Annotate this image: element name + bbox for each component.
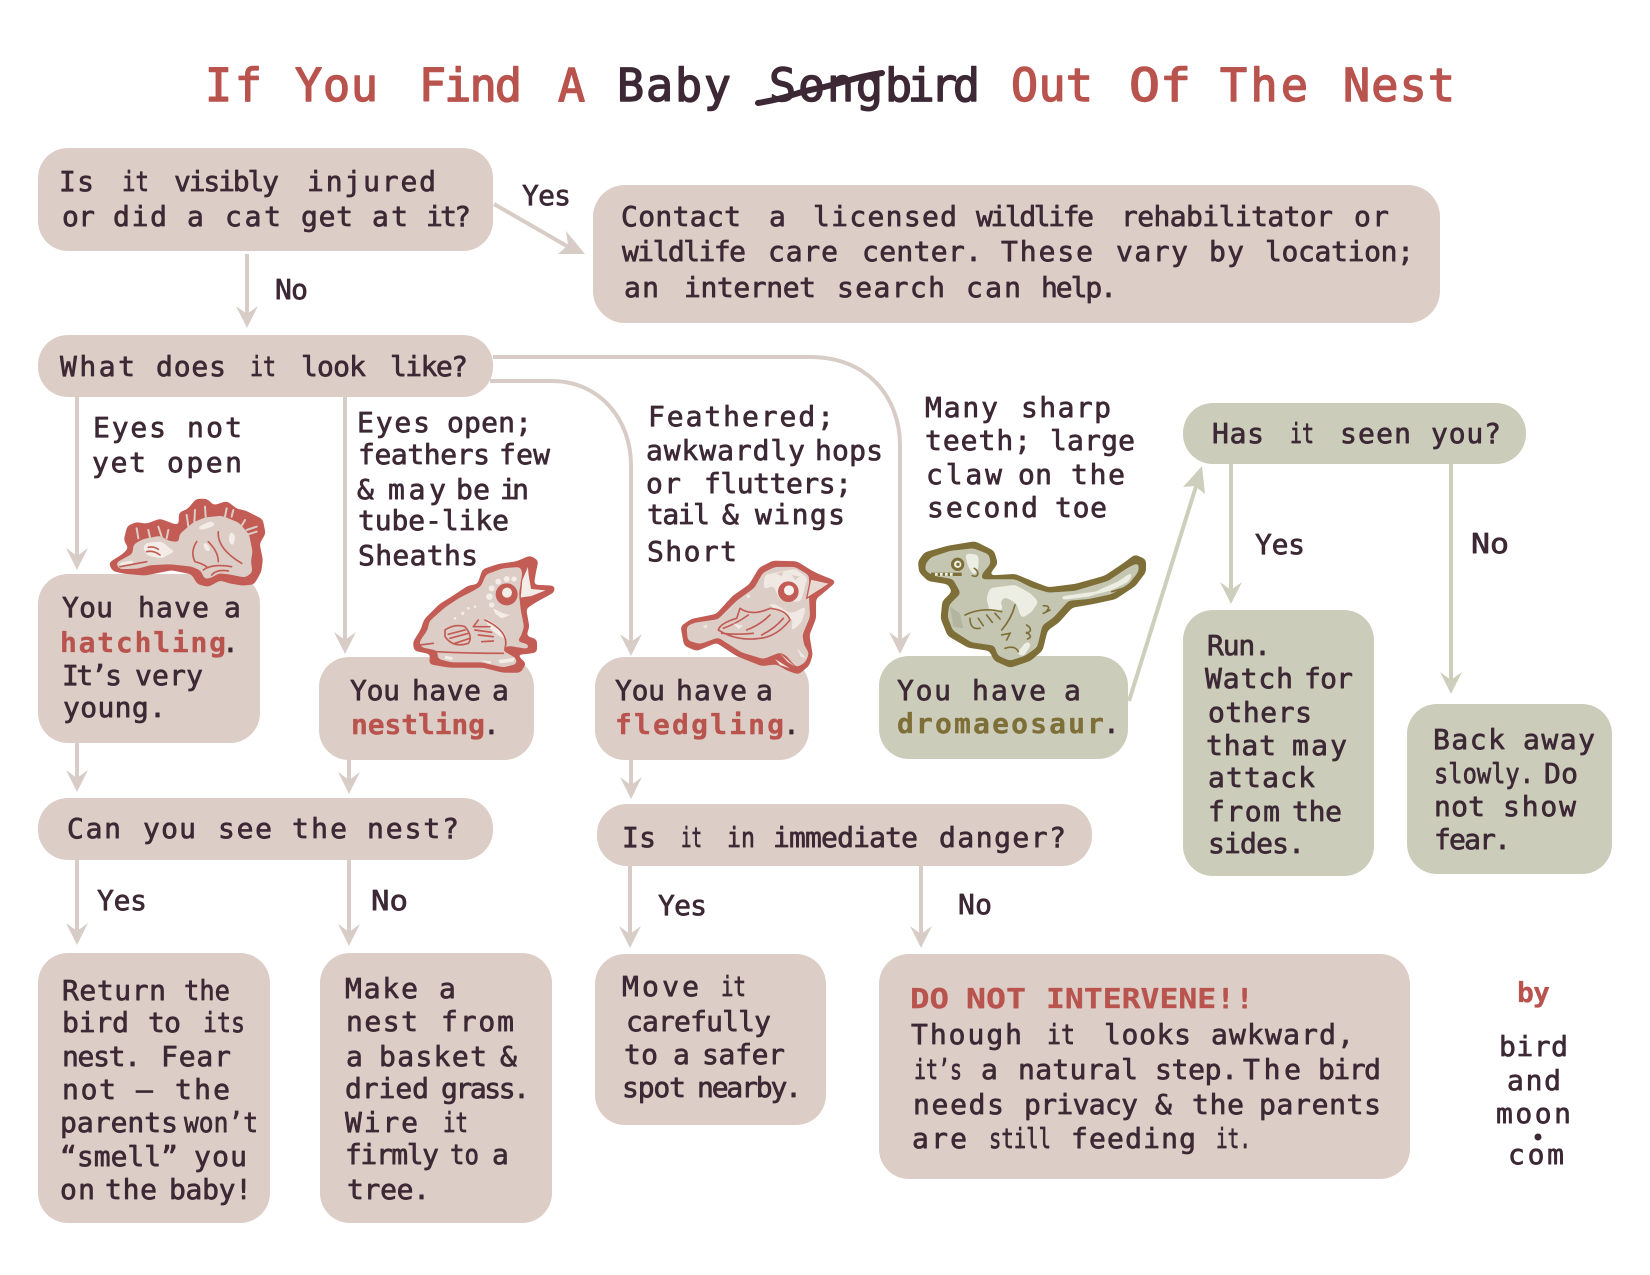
text: return the bird: nest. bbox=[62, 1040, 141, 1073]
text: contact rehabilitator: center. bbox=[862, 235, 982, 268]
text: contact rehabilitator: a bbox=[769, 200, 786, 233]
text: hatchling: You bbox=[62, 591, 113, 624]
text: injured question: injured bbox=[307, 165, 436, 198]
title: Nest bbox=[1343, 59, 1455, 112]
text: immediate danger: in bbox=[727, 821, 755, 854]
arrow: nest no bbox=[338, 860, 360, 946]
text: hatchling: It’s bbox=[62, 659, 122, 692]
text: hatchling: very bbox=[135, 659, 203, 692]
panel: has it seen you bbox=[1183, 403, 1526, 464]
heading: do not intervene: NOT bbox=[966, 982, 1026, 1015]
text: fledgling: have bbox=[676, 674, 747, 707]
text: eyes not yet open: yet bbox=[92, 446, 146, 479]
text: eyes not yet open bbox=[92, 411, 242, 479]
text: natural step explanation: parents bbox=[1259, 1088, 1381, 1121]
text: contact rehabilitator: location; bbox=[1265, 235, 1414, 268]
text: run: Watch bbox=[1205, 662, 1293, 695]
text: contact rehabilitator: by bbox=[1209, 235, 1244, 268]
panel: injured question bbox=[38, 148, 493, 251]
text: dromaeosaur: dromaeosaur bbox=[897, 707, 1104, 740]
label: seen yes: Yes bbox=[1255, 528, 1305, 561]
text: natural step explanation: step. bbox=[1155, 1053, 1238, 1086]
text: return the bird bbox=[60, 974, 258, 1206]
panel: do not intervene bbox=[879, 954, 1410, 1179]
label: danger yes: Yes bbox=[658, 889, 707, 922]
text: feathered description: or bbox=[646, 467, 681, 500]
text: eyes not yet open: not bbox=[187, 411, 242, 444]
text: feathered description bbox=[646, 400, 883, 568]
text: dromaeosaur: a bbox=[1064, 674, 1081, 707]
text: what does it look like: it bbox=[250, 350, 276, 383]
label: nest no: No bbox=[371, 884, 408, 917]
text: feathered description: hops bbox=[815, 434, 883, 467]
text: run bbox=[1205, 629, 1353, 860]
text: sharp teeth description: claw bbox=[926, 458, 1002, 491]
panel: hatchling bbox=[38, 574, 260, 743]
text: nestling: a bbox=[492, 674, 509, 707]
text: injured question: a bbox=[187, 200, 204, 233]
text: can you see the nest bbox=[67, 812, 459, 845]
text: injured question: cat bbox=[225, 200, 281, 233]
arrow: danger yes bbox=[619, 866, 641, 948]
text: run: attack bbox=[1208, 761, 1315, 794]
label: nest yes: Yes bbox=[97, 884, 147, 917]
text: natural step explanation: feeding bbox=[1071, 1122, 1196, 1155]
text: contact rehabilitator: licensed bbox=[813, 200, 957, 233]
text: back away bbox=[1433, 723, 1595, 856]
text: feathered description: flutters; bbox=[704, 467, 852, 500]
text: has it seen you: Has bbox=[1212, 417, 1264, 450]
heading: do not intervene: INTERVENE!! bbox=[1046, 982, 1254, 1015]
text: return the bird: bird bbox=[62, 1006, 129, 1039]
text: hatchling: a bbox=[224, 591, 241, 624]
panel: run bbox=[1183, 610, 1374, 876]
text: natural step explanation: & bbox=[1155, 1088, 1172, 1121]
text: eyes open description: tube-like bbox=[358, 504, 509, 537]
text: make a nest: firmly bbox=[345, 1138, 439, 1171]
text: natural step explanation: are bbox=[912, 1122, 967, 1155]
text: can you see the nest: see bbox=[218, 812, 272, 845]
text: immediate danger bbox=[622, 821, 1066, 854]
text: contact rehabilitator: vary bbox=[1116, 235, 1188, 268]
heading: do not intervene bbox=[910, 982, 1254, 1015]
text: run: the bbox=[1292, 795, 1342, 828]
panel: fledgling bbox=[595, 657, 809, 760]
text: injured question: it? bbox=[426, 200, 471, 233]
text: natural step explanation: the bbox=[1192, 1088, 1244, 1121]
text: return the bird: Fear bbox=[161, 1040, 231, 1073]
text: contact rehabilitator: an bbox=[624, 271, 659, 304]
text: nestling bbox=[350, 674, 509, 741]
text: sharp teeth description: the bbox=[1071, 458, 1125, 491]
text: fledgling: a bbox=[756, 674, 773, 707]
text: immediate danger: it bbox=[681, 821, 702, 854]
title: Song bbox=[769, 59, 883, 112]
text: what does it look like: look bbox=[301, 350, 366, 383]
text: move it carefully: carefully bbox=[626, 1005, 771, 1038]
icon: dromaeosaur bbox=[919, 542, 1145, 667]
credit: by bird and moon: moon bbox=[1496, 1097, 1571, 1130]
panel: return the bird bbox=[38, 953, 270, 1223]
title: If bbox=[205, 59, 262, 112]
text: eyes open description: few bbox=[499, 438, 550, 471]
text: natural step explanation: privacy bbox=[1024, 1088, 1138, 1121]
credit: by bird and moon bbox=[1496, 976, 1571, 1171]
text: run: Run. bbox=[1207, 629, 1271, 662]
text: what does it look like: like? bbox=[390, 350, 468, 383]
credit: by bird and moon: and bbox=[1507, 1064, 1561, 1097]
text: sharp teeth description: toe bbox=[1055, 491, 1107, 524]
text: make a nest: Wire bbox=[345, 1106, 418, 1139]
text: back away: slowly. bbox=[1434, 757, 1534, 790]
text: injured question: or bbox=[62, 200, 95, 233]
credit: by bird and moon: by bbox=[1517, 976, 1550, 1009]
text: move it carefully bbox=[622, 970, 802, 1104]
text: make a nest: nest bbox=[346, 1005, 418, 1038]
panel: move it carefully bbox=[595, 954, 826, 1125]
text: back away: Back bbox=[1433, 723, 1505, 756]
text: eyes not yet open: open bbox=[167, 446, 242, 479]
text: dromaeosaur: . bbox=[1103, 707, 1120, 740]
text: what does it look like: What bbox=[60, 350, 135, 383]
text: run: sides. bbox=[1208, 827, 1305, 860]
title: You bbox=[295, 59, 378, 112]
text: sharp teeth description: sharp bbox=[1021, 391, 1111, 424]
text: feathered description: awkwardly bbox=[646, 434, 805, 467]
label: danger no: No bbox=[958, 888, 992, 921]
arrow: seen yes bbox=[1220, 464, 1242, 604]
text: return the bird: – bbox=[136, 1073, 153, 1106]
text: move it carefully: to bbox=[624, 1038, 658, 1071]
text: return the bird: won’t bbox=[184, 1106, 258, 1139]
text: has it seen you: you? bbox=[1431, 417, 1501, 450]
text: nestling: . bbox=[483, 708, 500, 741]
text: return the bird: to bbox=[148, 1006, 181, 1039]
text: feathered description: tail bbox=[647, 498, 710, 531]
text: return the bird: the bbox=[184, 974, 230, 1007]
text: make a nest: & bbox=[500, 1040, 517, 1073]
text: run: that bbox=[1206, 729, 1276, 762]
arrow: eyes not yet open bbox=[66, 397, 88, 570]
arrow: sharp teeth bbox=[493, 357, 911, 654]
text: dromaeosaur: have bbox=[972, 674, 1046, 707]
text: immediate danger: danger? bbox=[939, 821, 1066, 854]
panel: can you see the nest bbox=[38, 798, 493, 860]
text: make a nest: a bbox=[439, 972, 456, 1005]
text: injured question: Is bbox=[59, 165, 94, 198]
text: return the bird: baby! bbox=[169, 1173, 252, 1206]
text: can you see the nest: nest? bbox=[367, 812, 459, 845]
text: return the bird: its bbox=[203, 1006, 245, 1039]
text: eyes open description: open; bbox=[447, 406, 532, 439]
text: what does it look like bbox=[60, 350, 468, 383]
text: nestling: nestling bbox=[351, 708, 485, 741]
text: can you see the nest: Can bbox=[67, 812, 121, 845]
text: contact rehabilitator: wildlife bbox=[976, 200, 1094, 233]
text: injured question: did bbox=[113, 200, 167, 233]
text: make a nest: it bbox=[443, 1106, 468, 1139]
text: return the bird: you bbox=[194, 1140, 247, 1173]
text: back away: away bbox=[1523, 723, 1595, 756]
text: fledgling: . bbox=[783, 708, 800, 741]
text: natural step explanation: Though bbox=[911, 1018, 1022, 1051]
text: natural step explanation bbox=[911, 1018, 1381, 1155]
text: back away: not bbox=[1434, 790, 1485, 823]
title: Find bbox=[419, 59, 522, 112]
text: contact rehabilitator: can bbox=[966, 271, 1021, 304]
icon: nestling bird bbox=[414, 557, 554, 672]
text: natural step explanation: it’s bbox=[914, 1053, 962, 1086]
text: move it carefully: a bbox=[673, 1038, 690, 1071]
title: bird bbox=[885, 59, 980, 112]
text: make a nest bbox=[345, 972, 530, 1206]
text: hatchling: . bbox=[222, 626, 239, 659]
text: move it carefully: safer bbox=[702, 1038, 785, 1071]
text: return the bird: Return bbox=[62, 974, 166, 1007]
arrow: hatchling to nest question bbox=[66, 743, 88, 792]
text: natural step explanation: bird bbox=[1318, 1053, 1381, 1086]
text: move it carefully: spot bbox=[622, 1071, 686, 1104]
text: can you see the nest: the bbox=[292, 812, 347, 845]
text: hatchling: hatchling bbox=[60, 626, 226, 659]
text: run: for bbox=[1304, 662, 1353, 695]
text: injured question: it bbox=[122, 165, 149, 198]
text: immediate danger: immediate bbox=[773, 821, 918, 854]
text: has it seen you: it bbox=[1290, 417, 1314, 450]
arrow: injured no bbox=[236, 254, 258, 328]
text: sharp teeth description bbox=[925, 391, 1135, 524]
title: Of bbox=[1129, 59, 1191, 112]
text: injured question bbox=[59, 165, 471, 233]
text: feathered description: Short bbox=[647, 535, 737, 568]
text: move it carefully: Move bbox=[622, 970, 699, 1003]
text: eyes open description: Sheaths bbox=[358, 539, 478, 572]
text: sharp teeth description: large bbox=[1050, 424, 1135, 457]
text: return the bird: parents bbox=[60, 1106, 178, 1139]
text: eyes not yet open: Eyes bbox=[93, 411, 166, 444]
text: make a nest: basket bbox=[379, 1040, 487, 1073]
text: sharp teeth description: second bbox=[927, 491, 1038, 524]
text: sharp teeth description: on bbox=[1018, 458, 1052, 491]
text: natural step explanation: still bbox=[989, 1122, 1051, 1155]
text: hatchling bbox=[60, 591, 241, 724]
title: A bbox=[558, 59, 585, 112]
text: natural step explanation: it. bbox=[1216, 1122, 1251, 1155]
text: contact rehabilitator: internet bbox=[684, 271, 816, 304]
text: nestling: You bbox=[350, 674, 400, 707]
panel: nestling bbox=[319, 657, 534, 760]
text: natural step explanation: The bbox=[1243, 1053, 1301, 1086]
text: can you see the nest: you bbox=[143, 812, 196, 845]
text: eyes open description: feathers bbox=[358, 438, 490, 471]
text: hatchling: young. bbox=[63, 691, 166, 724]
text: natural step explanation: looks bbox=[1104, 1018, 1191, 1051]
text: injured question: at bbox=[372, 200, 408, 233]
text: make a nest: a bbox=[346, 1040, 363, 1073]
panel: back away bbox=[1407, 704, 1612, 874]
text: injured question: visibly bbox=[174, 165, 279, 198]
title: The bbox=[1220, 59, 1308, 112]
title: Out bbox=[1011, 59, 1093, 112]
arrow: danger no bbox=[910, 866, 932, 948]
text: contact rehabilitator: or bbox=[1354, 200, 1389, 233]
text: move it carefully: nearby. bbox=[697, 1071, 802, 1104]
text: contact rehabilitator: Contact bbox=[621, 200, 741, 233]
arrow: fledgling to danger question bbox=[620, 760, 642, 799]
text: injured question: get bbox=[301, 200, 353, 233]
text: has it seen you: seen bbox=[1340, 417, 1411, 450]
text: return the bird: the bbox=[105, 1173, 157, 1206]
arrow: dromaeosaur to seen question bbox=[1129, 466, 1205, 701]
text: contact rehabilitator: search bbox=[837, 271, 945, 304]
text: contact rehabilitator bbox=[621, 200, 1414, 304]
text: fledgling bbox=[615, 674, 800, 741]
icon: fledgling bird bbox=[682, 562, 835, 673]
text: dromaeosaur: You bbox=[897, 674, 951, 707]
text: eyes open description: Eyes bbox=[357, 406, 430, 439]
text: natural step explanation: a bbox=[981, 1053, 998, 1086]
text: what does it look like: does bbox=[156, 350, 226, 383]
text: dromaeosaur bbox=[897, 674, 1120, 740]
text: make a nest: tree. bbox=[347, 1173, 430, 1206]
text: feathered description: wings bbox=[755, 498, 845, 531]
text: feathered description: Feathered; bbox=[648, 400, 834, 433]
panel: what does it look like bbox=[38, 335, 493, 397]
text: natural step explanation: natural bbox=[1018, 1053, 1138, 1086]
text: make a nest: dried bbox=[345, 1072, 429, 1105]
credit: by bird and moon: com bbox=[1508, 1138, 1564, 1171]
text: sharp teeth description: Many bbox=[925, 391, 998, 424]
text: make a nest: from bbox=[441, 1005, 514, 1038]
text: contact rehabilitator: care bbox=[768, 235, 838, 268]
text: fledgling: You bbox=[615, 674, 665, 707]
text: immediate danger: Is bbox=[622, 821, 656, 854]
text: return the bird: not bbox=[62, 1073, 116, 1106]
text: return the bird: on bbox=[60, 1173, 95, 1206]
title: Baby bbox=[617, 59, 731, 112]
text: eyes open description: be bbox=[456, 473, 490, 506]
text: contact rehabilitator: wildlife bbox=[622, 235, 746, 268]
text: contact rehabilitator: help. bbox=[1041, 271, 1117, 304]
text: feathered description: & bbox=[722, 498, 739, 531]
title bbox=[205, 59, 1455, 112]
arrow: feathered bbox=[490, 381, 642, 656]
label: yes to rehabilitator: Yes bbox=[522, 179, 571, 212]
text: natural step explanation: needs bbox=[913, 1088, 1004, 1121]
text: hatchling: have bbox=[138, 591, 209, 624]
text: return the bird: the bbox=[175, 1073, 230, 1106]
text: eyes open description bbox=[357, 406, 550, 572]
text: back away: Do bbox=[1544, 757, 1578, 790]
text: make a nest: to bbox=[450, 1138, 479, 1171]
arrow: nest yes bbox=[66, 860, 88, 945]
panel: dromaeosaur bbox=[879, 656, 1128, 759]
text: nestling: have bbox=[412, 674, 481, 707]
text: eyes open description: may bbox=[388, 473, 446, 506]
text: return the bird: “smell” bbox=[60, 1140, 178, 1173]
icon: hatchling bird bbox=[110, 500, 264, 586]
text: make a nest: a bbox=[492, 1138, 509, 1171]
arrow: nestling to nest question bbox=[338, 760, 360, 794]
text: fledgling: fledgling bbox=[615, 708, 784, 741]
text: run: may bbox=[1292, 729, 1347, 762]
panel: immediate danger bbox=[597, 804, 1092, 866]
text: eyes open description: & bbox=[357, 473, 374, 506]
arrow: injured yes bbox=[494, 204, 585, 254]
label: seen no: No bbox=[1471, 527, 1509, 560]
text: contact rehabilitator: rehabilitator bbox=[1121, 200, 1333, 233]
heading: do not intervene: DO bbox=[910, 982, 949, 1015]
text: move it carefully: it bbox=[721, 970, 746, 1003]
text: make a nest: grass. bbox=[441, 1072, 530, 1105]
text: run: from bbox=[1208, 795, 1280, 828]
text: back away: fear. bbox=[1434, 823, 1511, 856]
panel: contact rehabilitator bbox=[593, 185, 1440, 323]
arrow: seen no bbox=[1440, 464, 1462, 694]
panel: make a nest bbox=[320, 953, 552, 1223]
label: no after injured: No bbox=[275, 273, 308, 306]
text: eyes open description: in bbox=[500, 473, 529, 506]
text: has it seen you bbox=[1212, 417, 1501, 450]
credit: by bird and moon: bird bbox=[1499, 1030, 1568, 1063]
text: back away: show bbox=[1503, 790, 1576, 823]
text: contact rehabilitator: These bbox=[1001, 235, 1093, 268]
arrow: eyes open bbox=[334, 397, 356, 654]
text: run: others bbox=[1208, 696, 1312, 729]
text: sharp teeth description: teeth; bbox=[925, 424, 1031, 457]
text: make a nest: Make bbox=[345, 972, 418, 1005]
text: natural step explanation: it bbox=[1047, 1018, 1075, 1051]
text: natural step explanation: awkward, bbox=[1211, 1018, 1354, 1051]
